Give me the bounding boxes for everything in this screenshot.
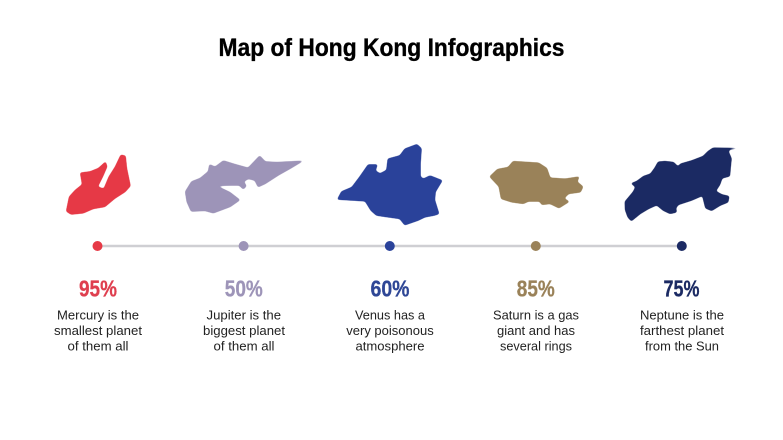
stat: Neptune: 75% [664, 276, 700, 302]
stat: Mercury: of them all [68, 338, 129, 353]
stat: Venus: atmosphere [356, 338, 424, 353]
stat: Mercury: Mercury is the [57, 308, 139, 323]
stat: Neptune: from the Sun [645, 338, 719, 353]
stat: Mercury [54, 276, 142, 353]
stat: Neptune [640, 276, 724, 353]
stat: Mercury: smallest planet [54, 323, 142, 338]
stat: Saturn [493, 276, 579, 353]
stat: Venus [346, 276, 434, 353]
stat: Jupiter: biggest planet [203, 323, 285, 338]
stat: Saturn: several rings [500, 338, 572, 353]
map: Neptune navy region [625, 148, 741, 221]
stat: Jupiter: 50% [225, 276, 263, 302]
map: Venus blue region [337, 144, 443, 225]
stat: Jupiter [203, 276, 285, 353]
stat: Neptune: Neptune is the [640, 308, 724, 323]
stat: Venus: Venus has a [355, 308, 426, 323]
map: Mercury red region [66, 155, 131, 215]
stat: Venus: 60% [370, 276, 410, 302]
stat: Jupiter: Jupiter is the [207, 308, 281, 323]
stat: Jupiter: of them all [214, 338, 275, 353]
stat: Saturn: 85% [517, 276, 555, 302]
stat: Saturn: giant and has [497, 323, 575, 338]
timeline [92, 241, 687, 251]
map: Saturn tan region [489, 161, 583, 208]
stat: Neptune: farthest planet [640, 323, 724, 338]
stat: Mercury: 95% [79, 276, 117, 302]
stat: Venus: very poisonous [346, 323, 434, 338]
stat: Saturn: Saturn is a gas [493, 308, 579, 323]
title: Map of Hong Kong Infographics [218, 34, 564, 62]
map: Jupiter purple region [185, 155, 304, 213]
